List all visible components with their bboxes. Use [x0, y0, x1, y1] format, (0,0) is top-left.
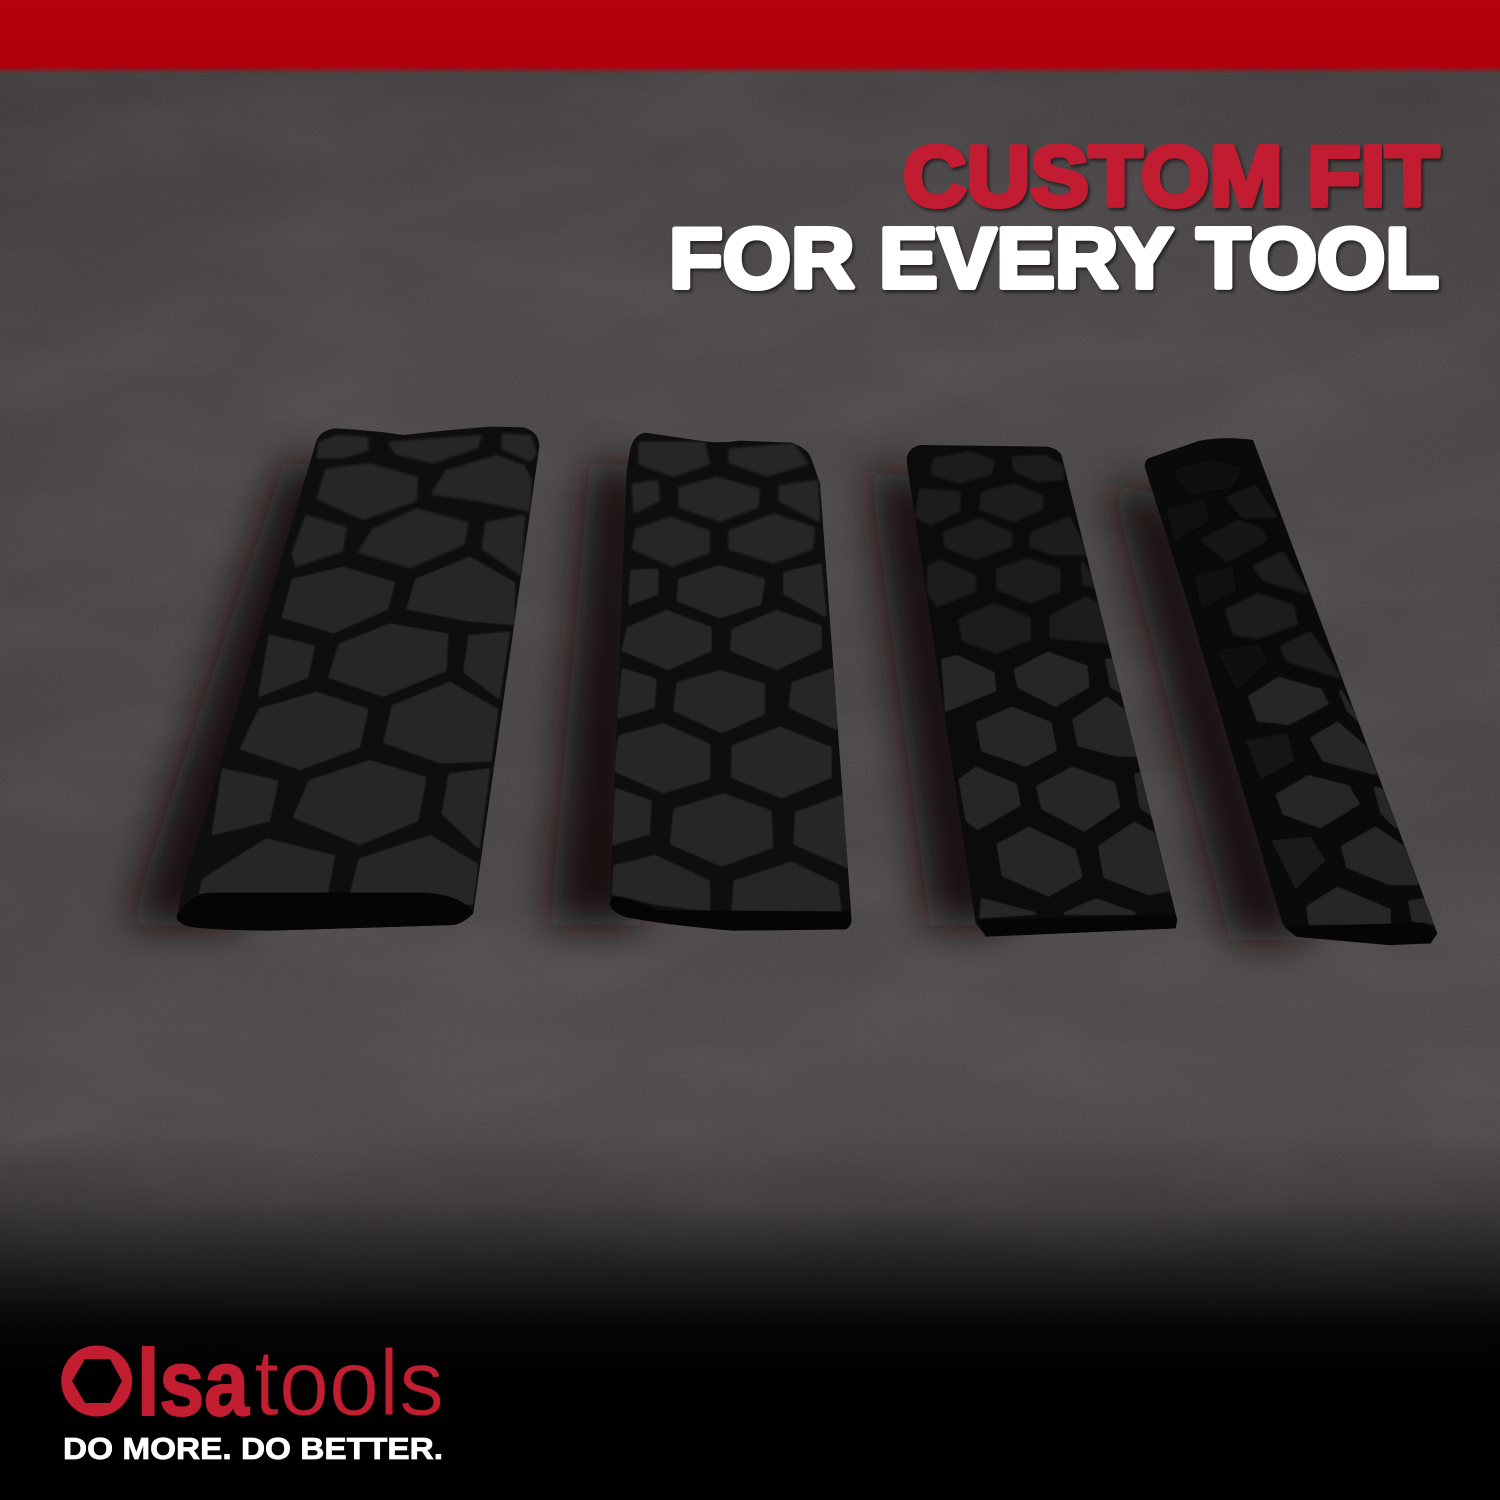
grip 2: medium-large sleeve	[610, 433, 852, 931]
grip 3 open end	[977, 915, 1177, 937]
heading: CUSTOM FIT / FOR EVERY TOOL	[669, 130, 1439, 306]
tagline: DO MORE. DO BETTER.	[63, 1431, 443, 1466]
red band at top	[0, 0, 1500, 70]
grip shadows on the mat	[130, 460, 1310, 940]
grip 2 open end	[610, 897, 852, 931]
grip 1 open end	[177, 893, 473, 931]
heading line 1: CUSTOM FIT	[903, 130, 1439, 224]
grip 3 upper hexagons	[917, 453, 1110, 652]
grip 4 open end	[1284, 923, 1437, 945]
logo: Olsatools	[61, 1330, 444, 1435]
logo text: lsa: lsa	[137, 1330, 250, 1435]
grip 1 upper hexagons	[293, 435, 535, 573]
bottom black fade	[0, 1130, 1500, 1500]
grip 2 body	[610, 433, 852, 931]
grip 2 upper hexagons	[633, 443, 818, 565]
grip 3 body	[907, 445, 1177, 937]
grip 4 body	[1145, 438, 1437, 945]
grip 1 body	[177, 427, 539, 931]
grip 1 lower hexagons	[200, 558, 513, 903]
grip 4 lower hexagons	[1248, 678, 1434, 923]
grip 2 lower hexagons	[613, 565, 848, 910]
grip 3: medium sleeve	[907, 445, 1177, 937]
heading line 2: FOR EVERY TOOL	[669, 212, 1439, 306]
grip 1: large heat-shrink sleeve	[177, 427, 539, 931]
grip 4: narrow sleeve	[1145, 438, 1437, 945]
grip 3 lower hexagons	[943, 653, 1169, 917]
grip 4 upper hexagons	[1202, 486, 1341, 678]
logo text: tools: tools	[254, 1330, 444, 1435]
logo hex nut O	[61, 1346, 132, 1416]
